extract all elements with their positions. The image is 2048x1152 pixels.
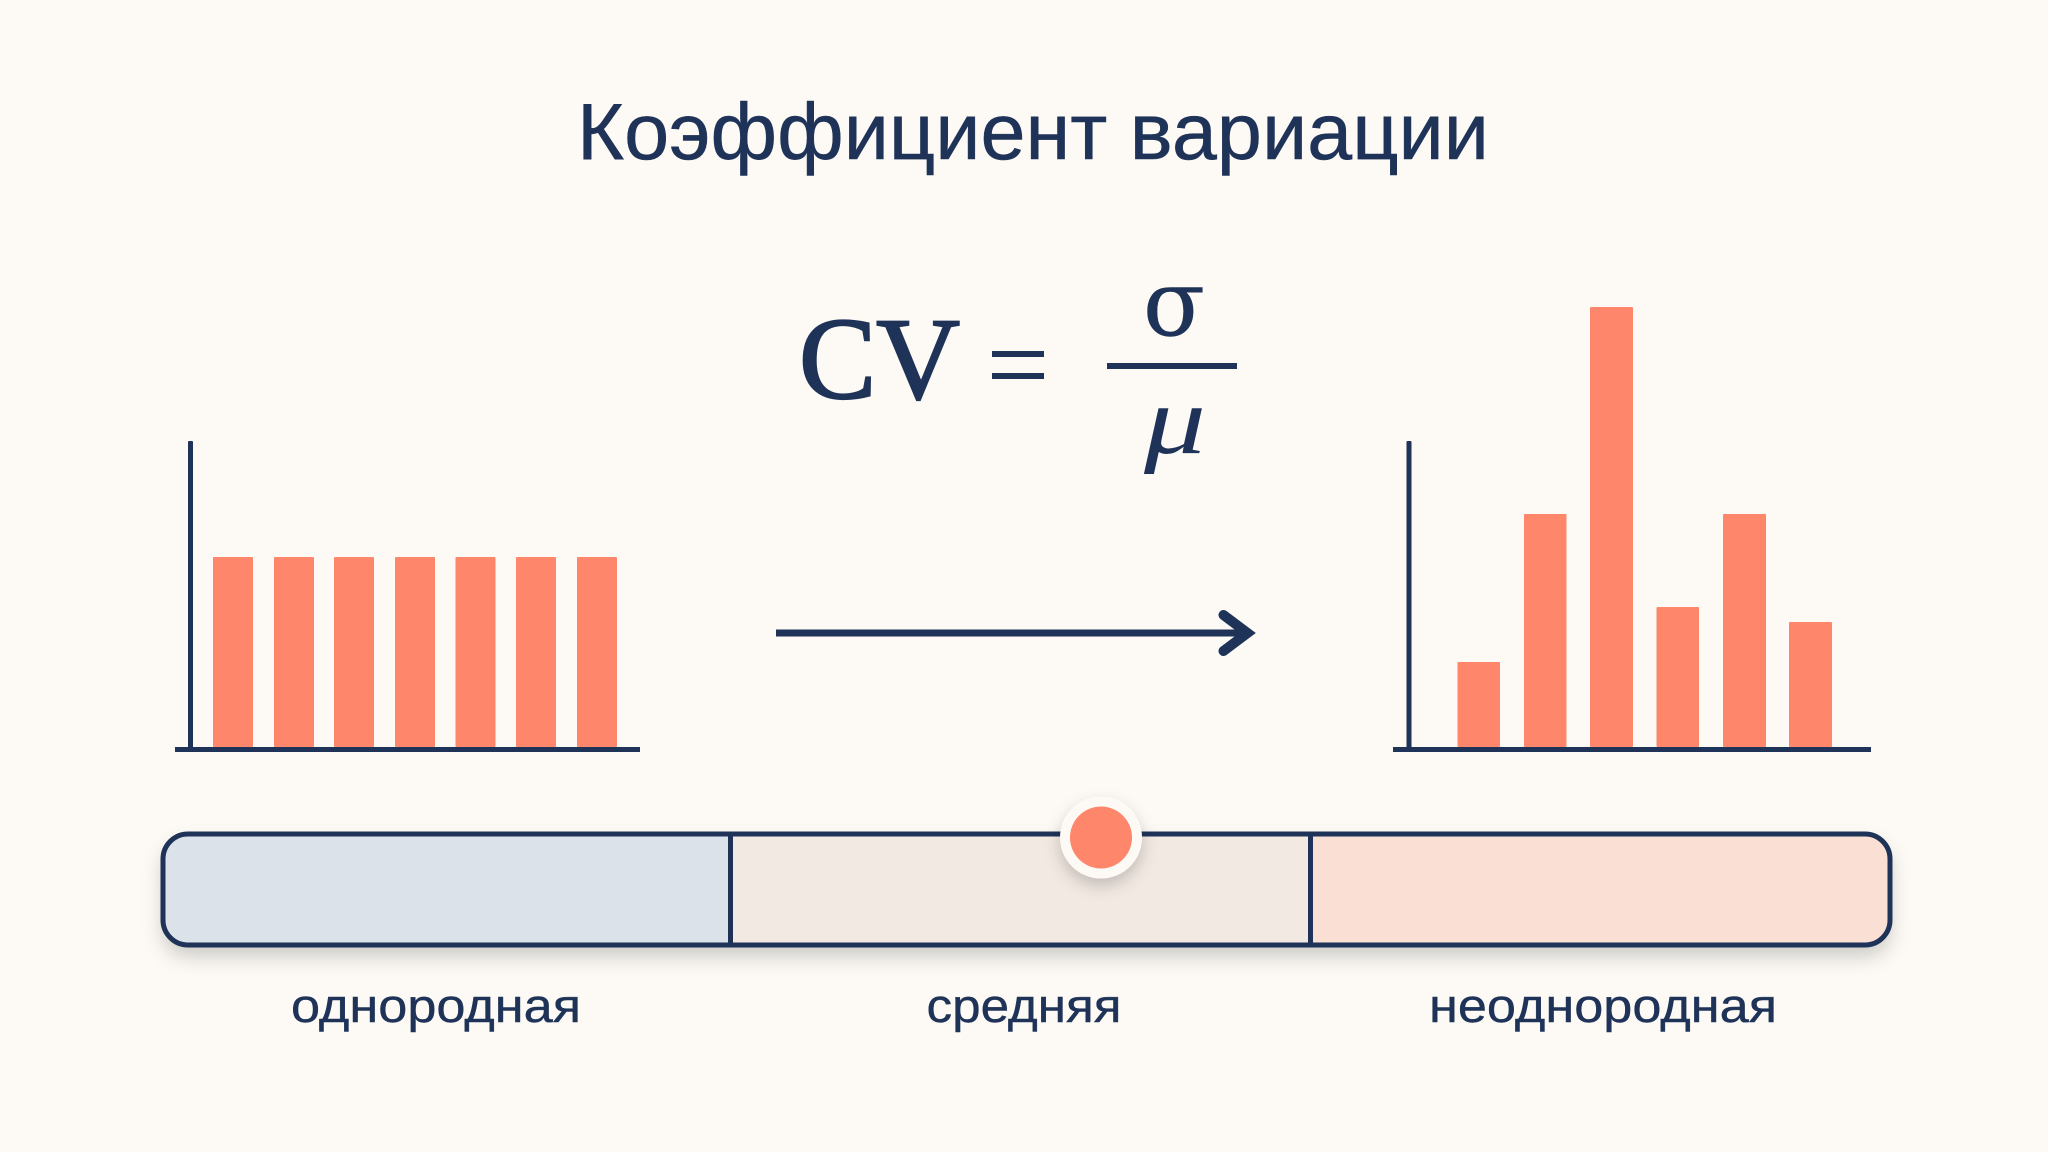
scale bar: [163, 834, 1891, 945]
scale segments: [163, 834, 1891, 945]
arrow: [776, 615, 1248, 651]
equals sign: [992, 351, 1044, 379]
right chart: heterogeneous distribution: [1393, 307, 1871, 752]
left chart: homogeneous distribution: [175, 441, 640, 752]
segment dividers: [728, 834, 1313, 945]
label: medium: средняя: [926, 979, 1122, 1032]
x axis: [175, 747, 640, 752]
y axis: [1406, 441, 1412, 752]
x axis: [1393, 747, 1871, 752]
scale bar shadow: [163, 834, 1890, 945]
fraction line: [1107, 363, 1237, 369]
scale outline: [163, 834, 1890, 945]
equal bars: [213, 557, 617, 747]
formula left side: CV: CV: [799, 295, 960, 424]
scale marker: [1060, 796, 1142, 878]
denominator: mu: μ: [1143, 367, 1206, 474]
title: Коэффициент вариации: [577, 87, 1489, 176]
label: homogeneous: однородная: [291, 979, 581, 1032]
label: heterogeneous: неоднородная: [1429, 979, 1777, 1032]
numerator: sigma: σ: [1143, 250, 1205, 357]
formula: CV = sigma / mu: [799, 250, 1237, 474]
y axis: [188, 441, 193, 752]
uneven bars: [1458, 307, 1832, 747]
